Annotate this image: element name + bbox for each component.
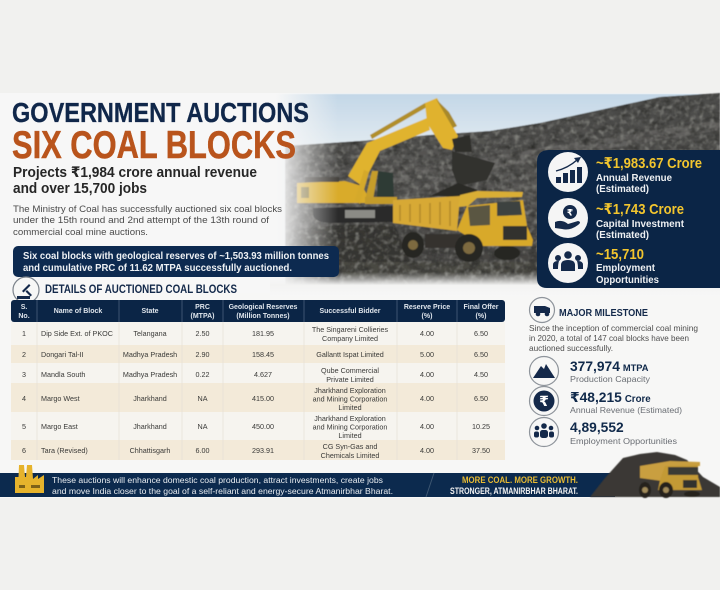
row 1: Dip Side Ext. of PKOC xyxy=(41,329,113,338)
row 2: Madhya Pradesh xyxy=(123,350,177,359)
stat: employment: Employment xyxy=(596,263,656,274)
table header: No. xyxy=(18,313,30,320)
row 6 xyxy=(22,442,490,460)
row 1: 6.50 xyxy=(474,329,488,338)
excavator body xyxy=(297,181,372,203)
stat: annual revenue total xyxy=(570,390,682,415)
table header xyxy=(11,300,505,322)
row 2: 6.50 xyxy=(474,350,488,359)
intro paragraph xyxy=(13,204,282,238)
row 5: 5 xyxy=(22,422,26,431)
row 5: Limited xyxy=(338,431,362,440)
stat: annual revenue total: ₹48,215 Crore xyxy=(570,390,651,405)
row 4: Jharkhand xyxy=(133,394,167,403)
title xyxy=(12,97,309,167)
milestone text: in 2020, a total of 147 coal blocks have been xyxy=(529,333,689,343)
table header: PRC xyxy=(195,304,210,311)
stat: employment: ~15,710 xyxy=(596,246,644,263)
row 5: 10.25 xyxy=(472,422,490,431)
row 4: Margo West xyxy=(41,394,80,403)
row 3: Mandla South xyxy=(41,370,85,379)
table header: Geological Reserves xyxy=(229,304,298,311)
icon: gavel xyxy=(13,277,39,303)
row 6: Tara (Revised) xyxy=(41,446,88,455)
subtitle xyxy=(13,165,257,197)
footer slogan: MORE COAL. MORE GROWTH. xyxy=(462,475,578,486)
row 4: 415.00 xyxy=(252,394,274,403)
row 3: 4.50 xyxy=(474,370,488,379)
subtitle: and over 15,700 jobs xyxy=(13,181,147,197)
row 6: 4.00 xyxy=(420,446,434,455)
stat: employment total: 4,89,552 xyxy=(570,420,624,435)
stat: employment xyxy=(596,246,659,286)
row 4: NA xyxy=(198,394,208,403)
table header: Reserve Price xyxy=(404,304,450,311)
table header: State xyxy=(141,308,159,315)
table header: S. xyxy=(21,304,27,311)
row 2: 5.00 xyxy=(420,350,434,359)
row 6: Chhattisgarh xyxy=(130,446,170,455)
row 1: 2.50 xyxy=(196,329,210,338)
row 4: Limited xyxy=(338,403,362,412)
footer slogan xyxy=(450,475,578,497)
icon: revenue chart xyxy=(548,152,588,192)
row 5: Margo East xyxy=(41,422,78,431)
excavator bucket with coal xyxy=(452,151,495,186)
footer message: and move India closer to the goal of a self-reliant and energy-secure Atmanirbhar Bharat. xyxy=(52,486,393,496)
icon: people group xyxy=(548,243,588,283)
icon: factory xyxy=(15,465,44,493)
subtitle: Projects ₹1,984 crore annual revenue xyxy=(13,165,257,181)
row 2 xyxy=(22,350,488,359)
footer image: coal pile and truck xyxy=(590,452,720,498)
row 5: Jharkhand xyxy=(133,422,167,431)
coal rocks xyxy=(302,224,409,265)
row 1 xyxy=(22,325,488,343)
row 5: and Mining Corporation xyxy=(313,422,387,432)
row 5: NA xyxy=(198,422,208,431)
dump truck wheels xyxy=(402,232,424,258)
dump truck body xyxy=(393,196,460,231)
row 6: 6.00 xyxy=(196,446,210,455)
row 3: Madhya Pradesh xyxy=(123,370,177,379)
milestone text: Since the inception of commercial coal mining xyxy=(529,323,698,333)
stat: annual revenue total: Annual Revenue (Estimated) xyxy=(570,405,682,415)
stat: capital investment xyxy=(596,201,685,241)
row 3: 4.00 xyxy=(420,370,434,379)
icon: hand holding rupee: ₹ xyxy=(567,208,573,218)
row 6: CG Syn-Gas and xyxy=(323,442,377,451)
table: auctioned coal blocks xyxy=(11,300,505,460)
row 4: 4.00 xyxy=(420,394,434,403)
table header: (Million Tonnes) xyxy=(236,313,290,320)
row 4 xyxy=(22,386,488,412)
stat: production capacity: Production Capacity xyxy=(570,374,651,384)
stat: annual revenue xyxy=(596,155,702,195)
icon: hand holding rupee xyxy=(548,198,588,238)
title: SIX COAL BLOCKS xyxy=(12,124,296,167)
title: GOVERNMENT AUCTIONS xyxy=(12,97,309,128)
row 6: Chemicals Limited xyxy=(321,451,379,460)
icon: people xyxy=(530,418,558,446)
row 3: 3 xyxy=(22,370,26,379)
row 4: Jharkhand Exploration xyxy=(314,386,386,395)
intro paragraph: The Ministry of Coal has successfully auctioned six coal blocks xyxy=(13,204,282,215)
footer message: These auctions will enhance domestic coal production, attract investments, create jobs xyxy=(52,475,383,485)
stat: annual revenue: ~₹1,983.67 Crore xyxy=(596,155,702,172)
milestone text: auctioned successfully. xyxy=(529,343,613,353)
stat: employment total: Employment Opportunities xyxy=(570,436,677,446)
row 2: Gallantt Ispat Limited xyxy=(316,350,384,359)
panel: major milestone xyxy=(529,298,698,446)
stat: employment: Opportunities xyxy=(596,275,659,286)
callout: reserves and PRC xyxy=(13,246,339,277)
hero fade into white xyxy=(0,93,345,293)
row 5 xyxy=(22,414,490,440)
table header: Successful Bidder xyxy=(319,308,381,315)
panel: key estimates xyxy=(537,150,720,288)
ground xyxy=(342,262,526,274)
row 6: 37.50 xyxy=(472,446,490,455)
row 4: 6.50 xyxy=(474,394,488,403)
icon: rupee: ₹ xyxy=(539,393,549,409)
row 1: The Singareni Collieries xyxy=(312,325,389,334)
icon: coal mountain xyxy=(530,356,558,386)
footer band xyxy=(0,452,720,498)
row 2: 2.90 xyxy=(196,350,210,359)
stat: production capacity xyxy=(570,359,651,384)
row 2: Dongari Tal-II xyxy=(41,350,84,359)
milestone text xyxy=(529,323,698,353)
row 3: Private Limited xyxy=(326,375,374,384)
excavator boom xyxy=(348,118,430,186)
table header: (MTPA) xyxy=(191,313,214,320)
row 5: 450.00 xyxy=(252,422,274,431)
row 5: 4.00 xyxy=(420,422,434,431)
excavator cab xyxy=(377,171,394,198)
table header: Name of Block xyxy=(54,308,102,315)
table rows background xyxy=(11,322,505,460)
table header: Final Offer xyxy=(463,304,499,311)
row 6: 293.91 xyxy=(252,446,274,455)
stat: capital investment: (Estimated) xyxy=(596,230,649,241)
stat: employment total xyxy=(570,420,677,446)
row 1: 1 xyxy=(22,329,26,338)
hero photo: excavator loading dump truck at coal mine xyxy=(285,92,720,284)
icon: rupee xyxy=(530,386,558,416)
row 1: Telangana xyxy=(133,329,167,338)
row 3: 0.22 xyxy=(196,370,210,379)
footer slogan: STRONGER, ATMANIRBHAR BHARAT. xyxy=(450,486,578,497)
milestone heading: MAJOR MILESTONE xyxy=(559,308,648,319)
table header: (%) xyxy=(476,313,486,320)
row 1: 4.00 xyxy=(420,329,434,338)
callout: reserves and PRC: and cumulative PRC of 11.62 MTPA successfully auctioned. xyxy=(23,263,292,274)
excavator chassis xyxy=(313,206,394,223)
table header: (%) xyxy=(422,313,432,320)
row 3: 4.627 xyxy=(254,370,272,379)
row 3: Qube Commercial xyxy=(321,366,379,375)
icon: mining truck xyxy=(530,298,554,322)
stat: annual revenue: Annual Revenue xyxy=(596,173,672,184)
table heading: DETAILS OF AUCTIONED COAL BLOCKS xyxy=(45,282,237,296)
row 2: 158.45 xyxy=(252,350,274,359)
intro paragraph: under the 15th round and 2nd attempt of the 13th round of xyxy=(13,215,269,226)
footer message xyxy=(52,475,393,496)
row 5: Jharkhand Exploration xyxy=(314,414,386,423)
callout: reserves and PRC: Six coal blocks with geological reserves of ~1,503.93 million tonnes xyxy=(23,251,330,262)
row 4: 4 xyxy=(22,394,26,403)
infographic background xyxy=(0,93,720,498)
row 4: and Mining Corporation xyxy=(313,394,387,404)
stat: capital investment: ~₹1,743 Crore xyxy=(596,201,684,218)
row 1: 181.95 xyxy=(252,329,274,338)
stat: capital investment: Capital Investment xyxy=(596,219,685,230)
row 2: 2 xyxy=(22,350,26,359)
row 6: 6 xyxy=(22,446,26,455)
row 3 xyxy=(22,366,488,384)
intro paragraph: commercial coal mine auctions. xyxy=(13,227,148,238)
stat: annual revenue: (Estimated) xyxy=(596,184,649,195)
stat: production capacity: 377,974 MTPA xyxy=(570,359,649,374)
row 1: Company Limited xyxy=(322,334,378,343)
